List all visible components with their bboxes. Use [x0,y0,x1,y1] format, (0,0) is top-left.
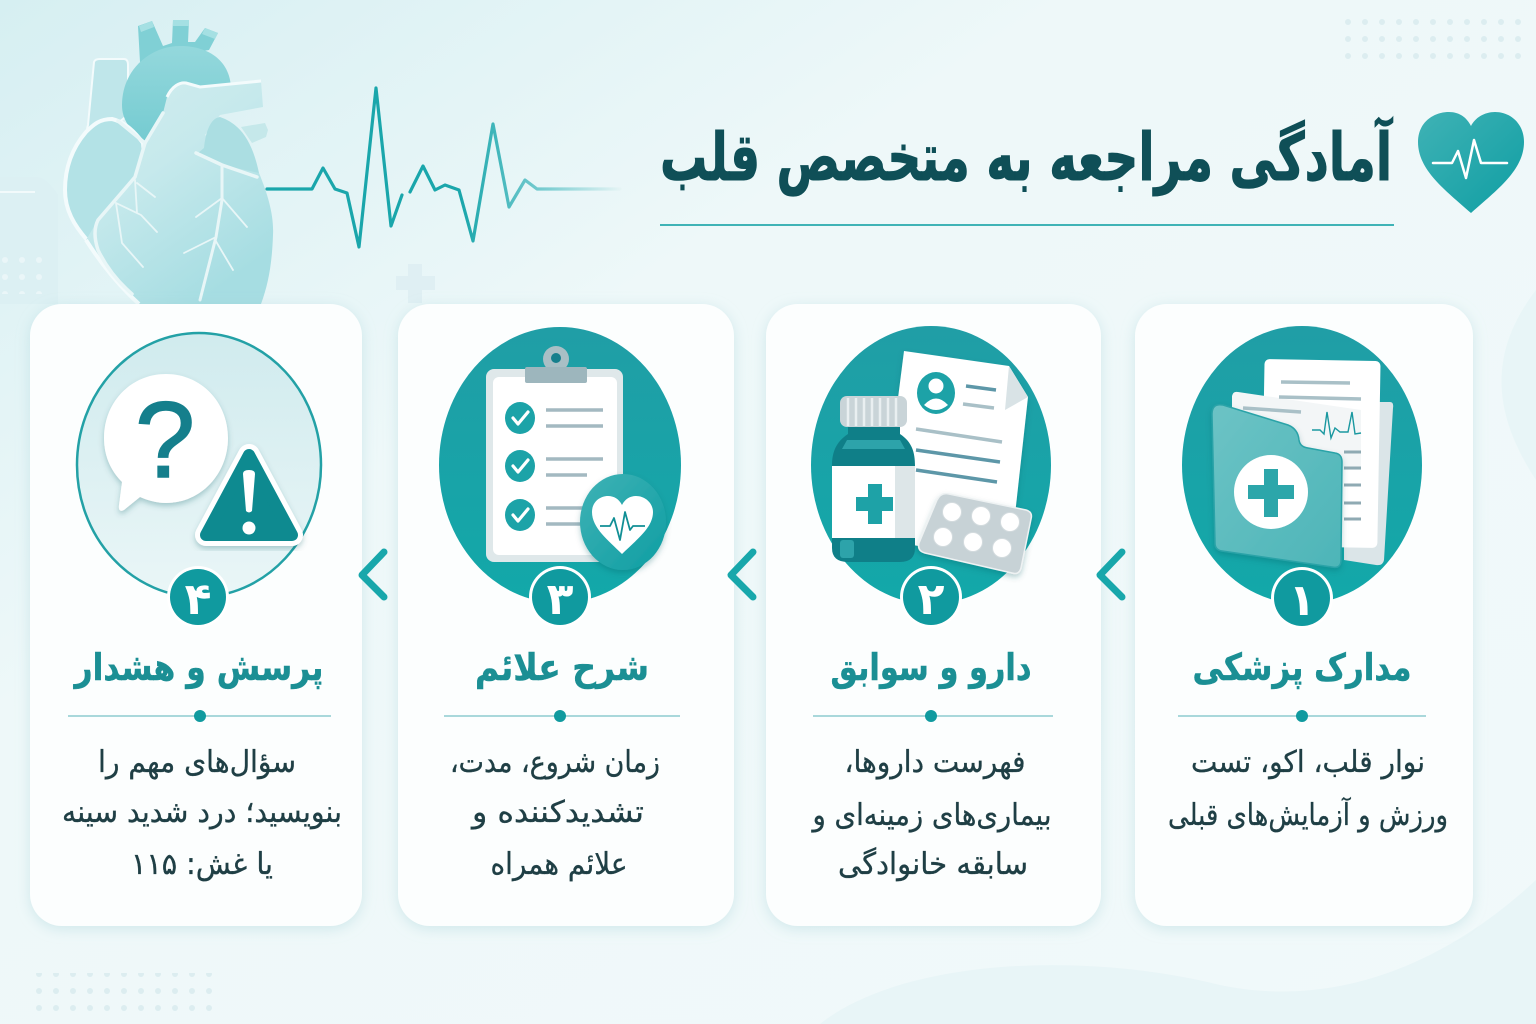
icon: folder and documents [1182,326,1422,604]
number badge 2 [900,566,962,628]
body text [450,745,660,882]
panel: step 3 describing symptoms [398,304,734,926]
ECG line [267,88,620,247]
icon: question bubble and warning triangle [77,333,321,597]
body text: تشدیدکننده و [470,795,644,830]
heading: مدارک پزشکی [1192,646,1412,689]
body text: علائم همراه [490,847,628,882]
arrow 3 [362,552,384,597]
title underline [660,224,1394,226]
body text [62,745,342,882]
icon: medicine bottle and profile [811,326,1051,604]
body text: ورزش و آزمایش‌های قبلی [1168,797,1448,833]
icon: question bubble and warning triangle: ? [135,379,195,500]
number badge 3: ۳ [547,574,574,625]
icon: clipboard checklist [439,327,681,603]
body text: بنویسید؛ درد شدید سینه [62,795,342,830]
divider [813,710,1053,722]
body text: نوار قلب، اکو، تست [1191,745,1425,780]
heading: پرسش و هشدار [73,646,324,689]
heading: دارو و سوابق [830,646,1032,689]
arrow 2 [731,552,753,597]
arrow 1 [1100,552,1122,597]
number badge 2: ۲ [918,574,945,625]
panel: step 1 medical records [1135,304,1473,926]
body text: سؤال‌های مهم را [98,745,296,780]
number badge 4: ۴ [185,574,211,625]
number badge 3 [529,566,591,628]
panel: step 4 questions and warnings [30,304,362,926]
number badge 1 [1271,567,1333,629]
panel: step 2 medicine and history [766,304,1101,926]
divider [1178,710,1426,722]
divider [444,710,680,722]
number badge 1: ۱ [1289,575,1315,626]
number badge 4 [167,566,229,628]
body text: فهرست داروها، [844,745,1026,780]
body text: سابقه خانوادگی [838,847,1028,882]
body text [1168,745,1448,833]
icon: title heart [1418,112,1524,213]
heading: شرح علائم [475,646,649,689]
body text: بیماری‌های زمینه‌ای و [811,798,1052,833]
body text: یا غش: ۱۱۵ [131,847,273,882]
heart illustration [65,20,273,304]
body text [811,745,1052,882]
divider [68,710,331,722]
body text: زمان شروع، مدت، [450,745,660,780]
